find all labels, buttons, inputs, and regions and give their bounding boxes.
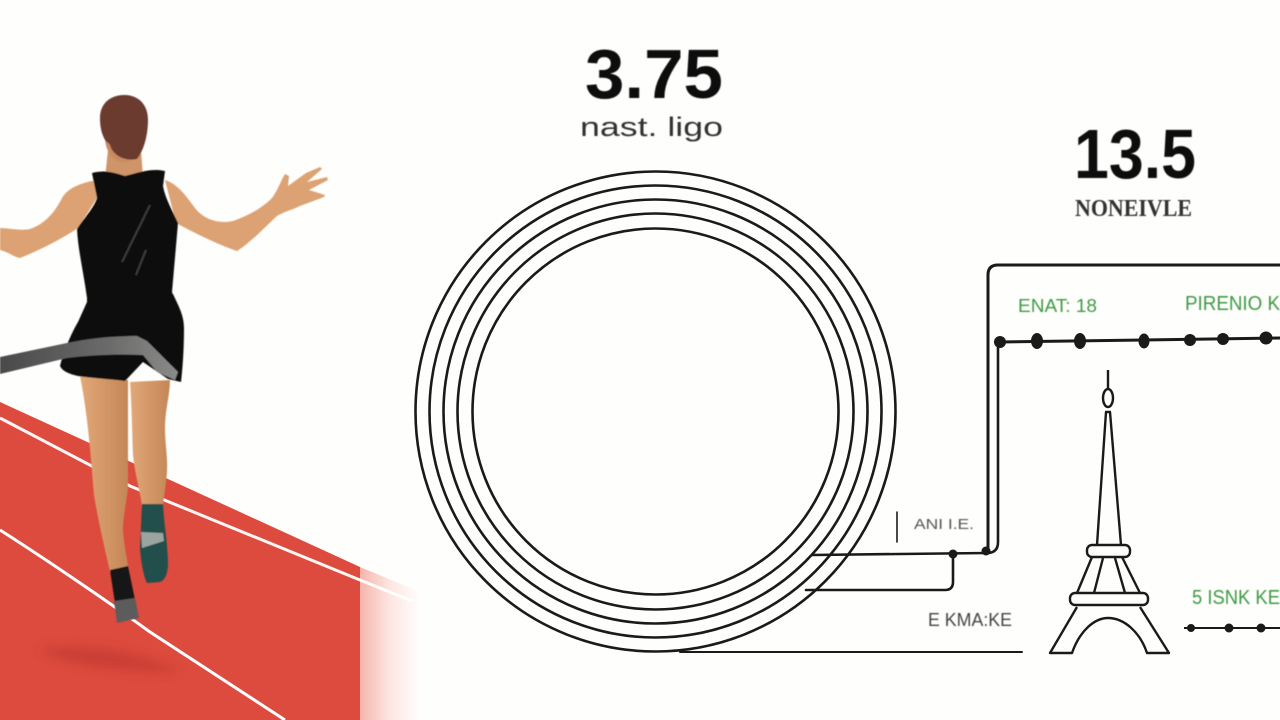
lower dotted timeline [1184,624,1280,632]
caption: nast. ligo [580,112,723,142]
label: upper connector: ANI I.E. [914,516,974,533]
stat: 3.75 [580,35,723,142]
connector lines [680,265,1280,652]
icon: Eiffel Tower [1050,370,1169,653]
back leg [130,380,170,506]
green label left: ENAT: 18 [1018,296,1097,316]
label: lower connector: E KMA:KE [928,610,1012,630]
grey ribbon [0,336,178,380]
runner [0,95,328,623]
caption: NONEIVLE [1075,196,1192,222]
upper dotted timeline [994,332,1280,349]
concentric track rings [416,172,896,652]
value: 13.5 [1074,115,1196,193]
black shorts [60,294,184,382]
neck [105,150,143,178]
right arm and hand [165,167,328,251]
teal shoe [140,504,168,583]
stat: 13.5 [1074,115,1196,222]
value: 3.75 [585,35,723,113]
front leg [80,376,129,572]
head [100,95,148,162]
black shoe [110,566,139,623]
left arm [0,180,97,258]
running track [0,402,420,720]
black tank top [77,170,178,306]
